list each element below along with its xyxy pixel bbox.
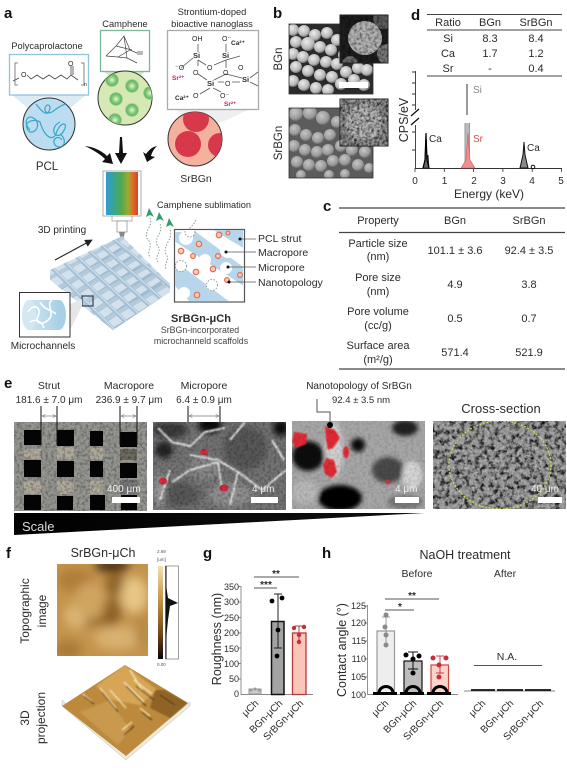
- SEM: micropore: [152, 417, 289, 510]
- table text: 571.4: [441, 347, 469, 359]
- baseline data points: [373, 686, 451, 694]
- polycaprolactone label: Polycaprolactone: [11, 41, 83, 51]
- before x labels: SrBGn-μCh: [402, 698, 446, 743]
- bar: SrBGn-μCh: [292, 625, 306, 694]
- BGn label: BGn: [273, 47, 285, 71]
- macropore label: 236.9 ± 9.7 μm: [96, 395, 162, 406]
- panel c: property table: [323, 198, 565, 369]
- strontium peak: [461, 133, 475, 168]
- axes and ticks: 100: [224, 659, 239, 669]
- NaOH title: NaOH treatment: [419, 548, 511, 562]
- polycaprolactone structure box: [10, 54, 88, 110]
- scaffold name and description: SrBGn-μCh: [171, 313, 231, 325]
- scale bar: [112, 497, 140, 503]
- panel label c: c: [323, 198, 331, 215]
- x axis ticks: [412, 176, 564, 187]
- axes and ticks: 110: [352, 654, 366, 664]
- nanoglass structure box: Sr²⁺: [224, 101, 237, 108]
- scaffold name and description: microchanneld scaffolds: [154, 336, 249, 346]
- nanoglass structure box: O: [238, 65, 244, 72]
- BGn SEM image: [287, 24, 373, 96]
- table text: [347, 215, 553, 366]
- bar: μCh before: [377, 612, 394, 694]
- bar: BGn-μCh before: [404, 652, 422, 694]
- axes and ticks: 200: [224, 628, 239, 638]
- table text: Property: [357, 215, 399, 227]
- before x labels: BGn-μCh: [382, 698, 419, 736]
- nanoglass structure box: Si: [193, 51, 200, 60]
- inset labels: PCL strut: [258, 233, 301, 245]
- title: SrBGn-μCh: [71, 546, 135, 560]
- colour bar and histogram: [um]: [157, 557, 166, 562]
- inset labels: Micropore: [258, 262, 305, 274]
- significance brackets: [254, 569, 299, 591]
- x axis ticks: 3: [500, 176, 506, 187]
- topographic label: Topographic: [18, 578, 32, 644]
- table text: 521.9: [515, 347, 543, 359]
- camphene structure box: [100, 30, 150, 78]
- ratio table: 1.2: [528, 48, 544, 60]
- panel label f: f: [6, 545, 12, 562]
- scale wedge label: Scale: [22, 519, 55, 534]
- inset labels: [258, 233, 324, 289]
- panel f: AFM images: [6, 545, 190, 760]
- x labels: SrBGn-μCh: [262, 698, 306, 743]
- PCL label: PCL: [36, 161, 59, 173]
- before x labels: [370, 698, 446, 743]
- after label: After: [494, 568, 517, 580]
- axes and ticks: 350: [224, 582, 239, 592]
- ratio table: BGn: [479, 17, 501, 29]
- panel g: roughness chart: [203, 545, 313, 743]
- SEM: strut and macropore: [14, 422, 147, 511]
- SrBGn SEM inset: [340, 99, 388, 146]
- scaffold lattice: [50, 236, 170, 330]
- BGn SEM inset: [340, 14, 388, 64]
- inset labels: Nanotopology: [258, 277, 324, 289]
- table text: Particle size: [348, 238, 408, 250]
- ratio table: Ratio: [435, 17, 461, 29]
- nanoglass structure box: OH: [192, 36, 202, 43]
- table text: 101.1 ± 3.6: [428, 245, 482, 257]
- macropore label: [96, 380, 162, 406]
- y axis title: Contact angle (°): [335, 603, 349, 697]
- calcium peak: [423, 135, 429, 168]
- axes and ticks: 105: [351, 672, 366, 682]
- micropore label: Micropore: [181, 380, 227, 392]
- N.A. annotation: [474, 651, 542, 666]
- panel label e: e: [4, 375, 12, 392]
- nanotopology label: Nanotopology of SrBGn: [306, 381, 412, 392]
- table text: 3.8: [521, 279, 537, 291]
- after x labels: [467, 698, 546, 743]
- table text: SrBGn: [512, 215, 546, 227]
- scale bar: [395, 497, 419, 503]
- strut label: Strut: [38, 380, 60, 392]
- PCL circle: [23, 98, 75, 150]
- colour bar and histogram: [157, 549, 178, 667]
- macropore label: Macropore: [104, 380, 154, 392]
- nanoglass structure box: Si: [222, 51, 229, 60]
- x labels: μCh: [240, 698, 261, 719]
- table text: 92.4 ± 3.5: [505, 245, 553, 257]
- EDS spectrum chart: [397, 71, 564, 201]
- 3D projection label: 3D: [18, 710, 32, 726]
- panel e: scaffold SEM series: [4, 375, 566, 535]
- nanoglass structure box: Ca²⁺: [175, 95, 189, 102]
- x axis ticks: 0: [412, 176, 418, 187]
- peak labels: Ca: [429, 134, 442, 145]
- nanoglass structure box: [168, 30, 258, 122]
- after x labels: μCh: [467, 698, 488, 719]
- camphene circle: [98, 71, 157, 127]
- silicon peak: [465, 123, 470, 168]
- table text: Surface area: [347, 340, 410, 352]
- N.A. annotation: N.A.: [497, 651, 517, 663]
- strontium-doped nanoglass label: [171, 7, 253, 29]
- nanotopology label: 92.4 ± 3.5 nm: [332, 395, 390, 406]
- arrow: 3D printing direction: [55, 240, 92, 260]
- nanoglass structure box: ⁻O: [175, 65, 185, 72]
- topographic label: image: [35, 594, 49, 627]
- strut label: [16, 380, 82, 406]
- ratio table: SrBGn: [519, 17, 553, 29]
- nanoglass structure box: O: [207, 65, 213, 72]
- cross-section label: Cross-section: [461, 401, 541, 416]
- ratio table: Si: [443, 33, 453, 45]
- nanotopology label: [306, 381, 412, 406]
- table text: 0.5: [447, 313, 463, 325]
- panel label g: g: [203, 545, 212, 562]
- panel a: fabrication schematic: [4, 5, 324, 352]
- nanoglass structure box: Sr²⁺: [172, 75, 185, 82]
- polycaprolactone structure box: O: [21, 72, 27, 79]
- significance brackets: [385, 591, 439, 613]
- microchannels label: Microchannels: [11, 341, 75, 352]
- table text: (m²/g): [363, 354, 393, 366]
- 3D projection label: [18, 692, 48, 744]
- 3D projection label: projection: [34, 692, 48, 744]
- x axis ticks: 4: [529, 176, 535, 187]
- strontium-doped nanoglass label: Strontium-doped: [178, 7, 246, 17]
- scale wedge: [14, 513, 425, 535]
- colour bar and histogram: 0.00: [157, 662, 166, 667]
- nanoglass structure box: O: [225, 81, 231, 88]
- nanoglass structure box: O⁻: [220, 93, 229, 100]
- second calcium peak: [520, 142, 528, 168]
- table text: 0.7: [521, 313, 537, 325]
- table text: (nm): [367, 286, 389, 298]
- SrBGn label: SrBGn: [273, 126, 285, 160]
- scale text: 40 μm: [531, 484, 559, 495]
- scaffold name and description: SrBGn-incorporated: [161, 325, 239, 335]
- polycaprolactone structure box: n: [84, 82, 87, 88]
- strut label: 181.6 ± 7.0 μm: [16, 395, 82, 406]
- rules: [339, 208, 565, 369]
- EDS spectrum chart: Sr: [473, 134, 484, 145]
- after x labels: SrBGn-μCh: [502, 698, 546, 743]
- strut dimension lines: [41, 406, 220, 469]
- scale bar: [538, 497, 562, 503]
- small selection box on scaffold: [82, 296, 93, 306]
- micropore label: [176, 380, 232, 406]
- axes and ticks: 100: [351, 690, 366, 700]
- nanoglass structure box: Si: [207, 79, 214, 88]
- inset labels: Macropore: [258, 247, 308, 259]
- x axis title: Energy (keV): [454, 187, 524, 201]
- ratio table: 8.4: [528, 33, 544, 45]
- microchannels inset: [20, 292, 82, 337]
- inset leader lines and dots: [224, 238, 256, 284]
- sublimation arrows: [146, 208, 196, 270]
- nanoglass structure box: O: [193, 93, 199, 100]
- colour bar and histogram: 2.69: [157, 549, 166, 554]
- nanoglass structure box: Si: [242, 75, 249, 84]
- nanoglass structure box: O: [193, 70, 199, 77]
- scale bar: [251, 497, 278, 503]
- after axis and flat data: [464, 690, 555, 691]
- nanoglass structure box: Ca²⁺: [231, 40, 245, 47]
- x labels: BGn-μCh: [248, 698, 285, 736]
- region outline: [449, 421, 551, 509]
- SrBGn circle: [168, 112, 222, 166]
- axes and ticks: 150: [224, 644, 239, 654]
- y axis title: CPS/eV: [397, 97, 411, 142]
- x labels: [240, 698, 306, 743]
- SrBGn label: SrBGn: [180, 173, 212, 185]
- topographic image: [57, 564, 148, 656]
- nanoglass structure box: O⁻: [222, 36, 231, 43]
- significance brackets: ***: [260, 580, 272, 591]
- table text: (cc/g): [364, 320, 392, 332]
- table text: (nm): [367, 251, 389, 263]
- EDS spectrum chart: Si: [473, 85, 482, 96]
- bar: BGn-μCh: [270, 594, 284, 694]
- significance brackets: **: [408, 591, 416, 602]
- y axis title: Roughness (nm): [210, 593, 224, 685]
- ratio table: 1.7: [482, 48, 498, 60]
- x axis ticks: 1: [442, 176, 448, 187]
- ratio table: 0.4: [528, 63, 544, 75]
- table text: Pore size: [355, 272, 401, 284]
- ratio table: [427, 14, 562, 76]
- x axis ticks: 2: [471, 176, 477, 187]
- axes and ticks: 125: [351, 601, 366, 611]
- bar: SrBGn-μCh before: [430, 656, 448, 694]
- axes and ticks: 0: [234, 689, 239, 699]
- camphene label: Camphene: [102, 19, 148, 29]
- axes and ticks: 115: [352, 636, 366, 646]
- significance brackets: **: [272, 569, 280, 580]
- bar: μCh: [249, 688, 261, 694]
- table text: 4.9: [447, 279, 463, 291]
- scale bar: [339, 82, 368, 88]
- nanotopology leader: [317, 399, 333, 428]
- panel label a: a: [4, 5, 13, 22]
- panel d: composition table and EDS chart: [397, 7, 564, 201]
- 3D projection surface: [62, 665, 190, 760]
- strontium-doped nanoglass label: bioactive nanoglass: [171, 19, 253, 29]
- ratio table: Ca: [441, 48, 456, 60]
- panel b: SEM images: [273, 5, 397, 180]
- arrow: camphene to printer: [115, 137, 127, 164]
- axes and ticks: 300: [224, 597, 239, 607]
- polycaprolactone structure box: O: [68, 61, 74, 68]
- SrBGn SEM image: [288, 106, 374, 180]
- axes and ticks: 250: [224, 613, 239, 623]
- significance brackets: *: [398, 602, 402, 613]
- 3D printer nozzle: [103, 171, 141, 240]
- table text: Pore volume: [347, 306, 409, 318]
- table text: BGn: [444, 215, 466, 227]
- panel label h: h: [322, 545, 331, 562]
- scaffold detail inset: [174, 228, 246, 303]
- panel label b: b: [273, 5, 282, 22]
- EDS spectrum chart: Ca: [527, 143, 540, 154]
- axes and ticks: 50: [229, 674, 239, 684]
- ratio table: -: [488, 63, 492, 75]
- scaffold name and description: [154, 313, 249, 346]
- nanoglass structure box: O: [223, 70, 229, 77]
- topographic label: [18, 578, 49, 644]
- before x labels: μCh: [370, 698, 391, 719]
- before label: Before: [402, 568, 433, 580]
- micropore label: 6.4 ± 0.9 μm: [176, 395, 232, 406]
- SEM: cross-section: [433, 421, 566, 509]
- scale text: 4 μm: [395, 484, 417, 495]
- arrow: SrBGn to printer: [143, 146, 157, 162]
- panel h: contact angle chart: [322, 545, 555, 743]
- axes and ticks: 120: [351, 618, 366, 628]
- panel label d: d: [411, 7, 420, 24]
- scale text: 4 μm: [252, 484, 274, 495]
- ratio table: Sr: [442, 63, 454, 75]
- axes and ticks: [224, 582, 313, 699]
- camphene sublimation label: Camphene sublimation: [157, 200, 251, 210]
- scale text: 400 μm: [107, 484, 141, 495]
- after x labels: BGn-μCh: [479, 698, 516, 736]
- SEM: nanotopology: [292, 420, 425, 511]
- x axis ticks: 5: [558, 176, 564, 187]
- 3D printing label: 3D printing: [38, 225, 86, 236]
- arrow: PCL to printer: [85, 146, 113, 164]
- ratio table: 8.3: [482, 33, 498, 45]
- axes and ticks: [351, 601, 458, 700]
